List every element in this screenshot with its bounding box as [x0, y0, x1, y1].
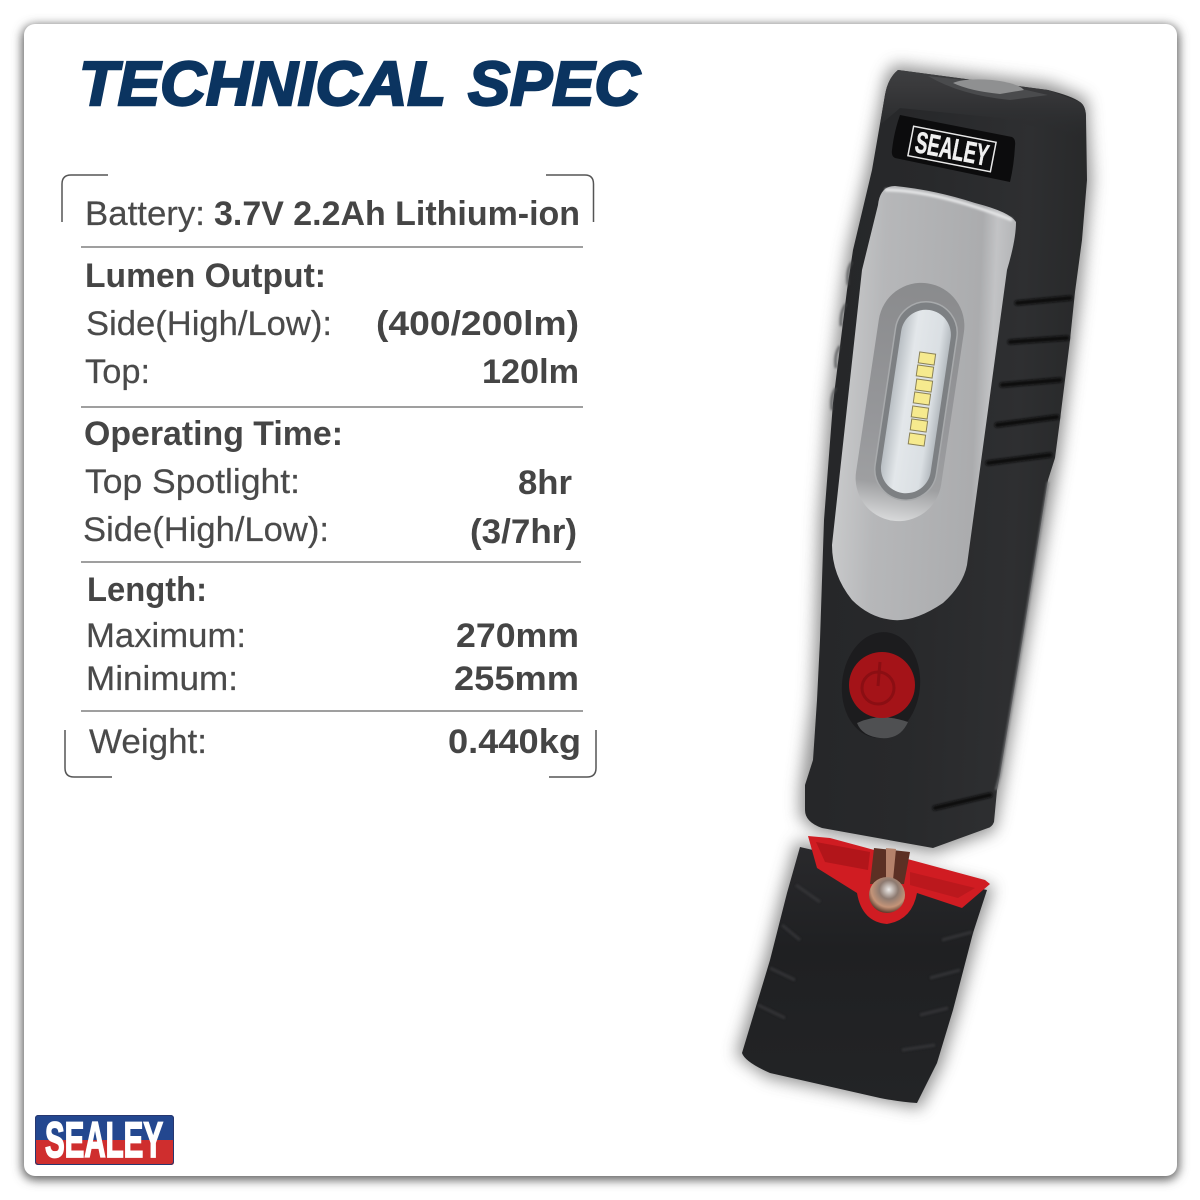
section: lumen output: Lumen Output:	[85, 257, 326, 295]
torch product illustration	[742, 70, 1087, 1103]
red clip	[808, 836, 990, 924]
section: length: 270mm	[456, 617, 579, 655]
sealey logo: SEALEY	[45, 1112, 163, 1168]
torch soft shadow	[742, 70, 1087, 1103]
specification table	[62, 175, 596, 777]
section: length: Minimum:	[86, 660, 238, 698]
section: operating time	[83, 415, 577, 551]
row: weight: Weight:	[89, 723, 207, 761]
top cap	[880, 70, 1086, 140]
lower handle	[742, 836, 990, 1103]
section: lumen output	[85, 257, 579, 391]
right edge highlight	[996, 482, 1048, 790]
row: weight: 0.440kg	[448, 723, 581, 761]
led strip	[908, 352, 936, 446]
top left bracket	[62, 175, 108, 222]
section: length: Maximum:	[86, 617, 246, 655]
row: battery: Battery:	[85, 195, 205, 233]
top lens dome	[953, 79, 1024, 94]
title	[79, 50, 641, 119]
section: operating time: Side(High/Low):	[83, 511, 329, 549]
top dome base	[928, 76, 1048, 100]
title: SPEC	[468, 50, 641, 119]
section: lumen output: (400/200lm)	[376, 305, 579, 343]
bottom right bracket	[549, 730, 596, 777]
upper body	[805, 70, 1087, 848]
section: lumen output: Top:	[85, 353, 150, 391]
section: length	[86, 571, 579, 698]
lower grip ridges	[758, 885, 972, 1050]
row: weight	[89, 723, 581, 761]
power button	[837, 628, 925, 742]
section: lumen output: Side(High/Low):	[86, 305, 332, 343]
section: operating time: 8hr	[518, 464, 572, 502]
section: length: Length:	[87, 571, 207, 609]
left grip ridges	[832, 262, 852, 410]
row: battery: 3.7V 2.2Ah Lithium-ion	[214, 195, 580, 233]
section: operating time: Operating Time:	[84, 415, 343, 453]
lens glass	[871, 298, 961, 504]
chrome ball	[869, 877, 905, 913]
sealey badge: SEALEY	[912, 126, 991, 173]
sealey logo	[35, 1112, 174, 1168]
section: operating time: Top Spotlight:	[85, 463, 300, 501]
silver panel	[832, 186, 1016, 620]
section: lumen output: 120lm	[482, 353, 579, 391]
title: TECHNICAL	[79, 50, 446, 119]
panel highlight	[885, 190, 1012, 220]
lens bezel	[850, 277, 970, 527]
section: length: 255mm	[454, 660, 579, 698]
sealey badge	[892, 115, 1015, 182]
right grip ridges	[935, 298, 1070, 808]
bottom left bracket	[65, 730, 112, 777]
top right bracket	[546, 175, 594, 222]
ball stem	[870, 848, 910, 884]
section: operating time: (3/7hr)	[470, 513, 577, 551]
